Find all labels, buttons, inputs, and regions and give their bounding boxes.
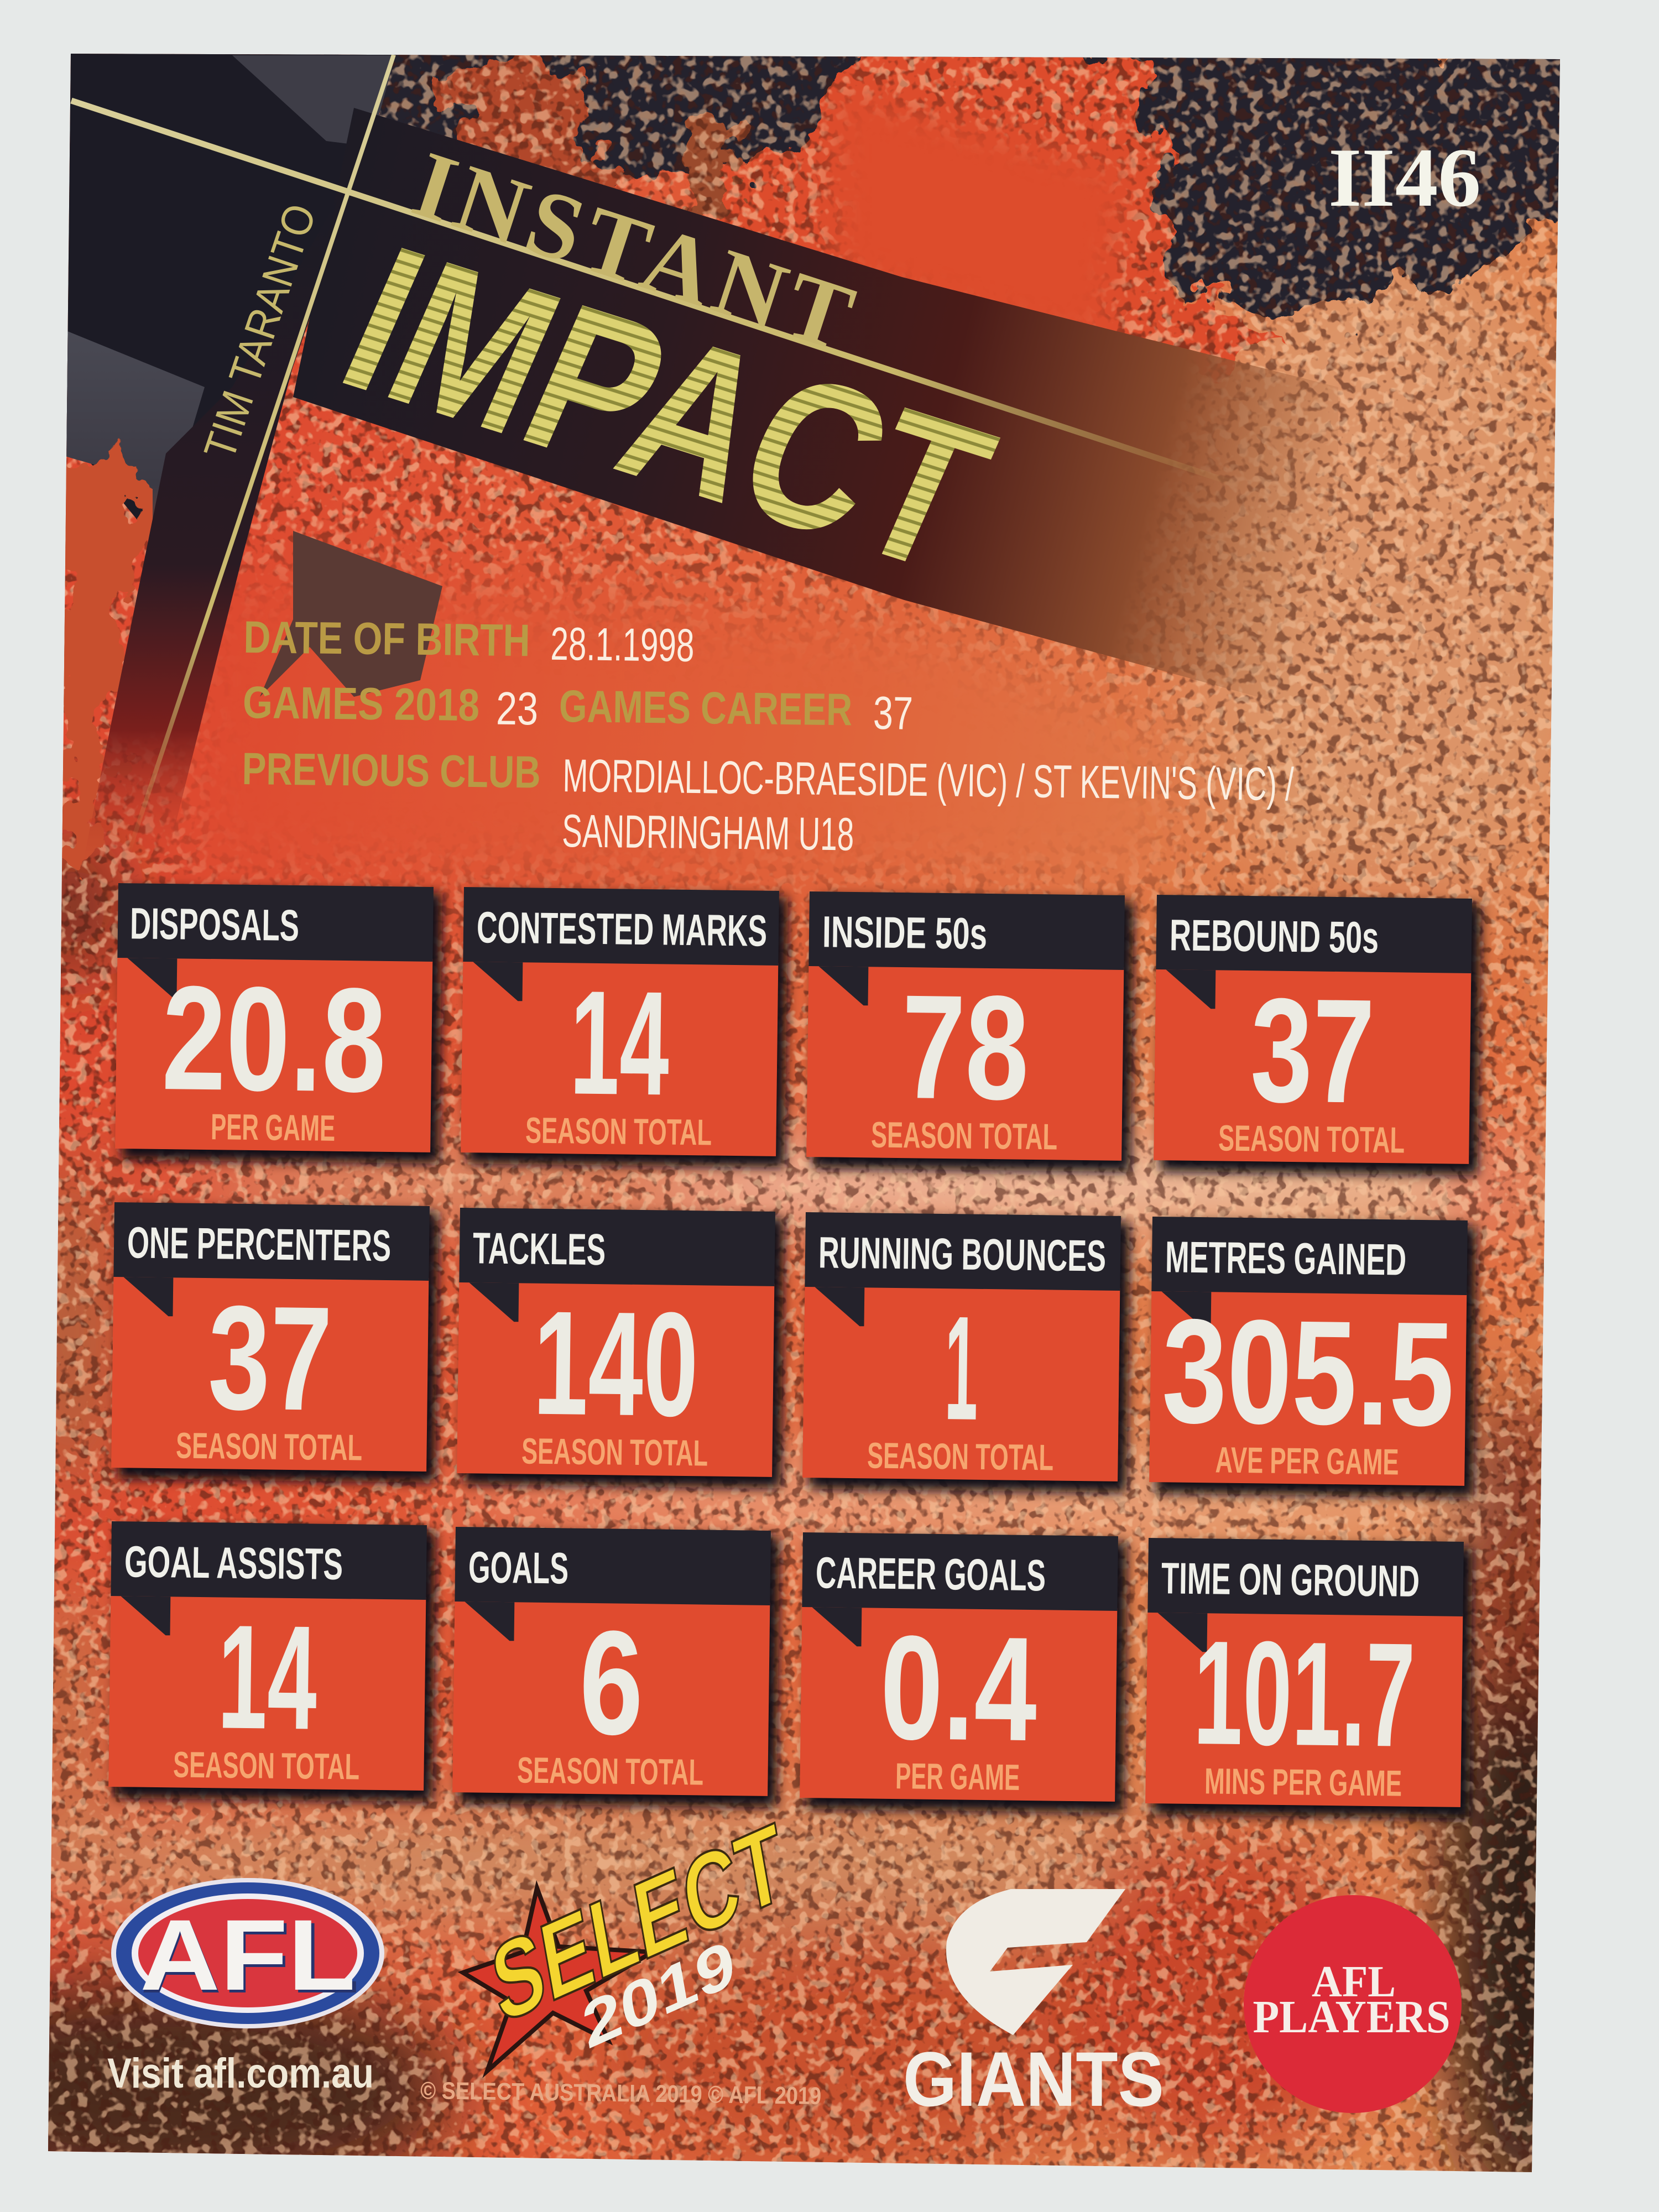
stat: running bounces: SEASON TOTAL bbox=[867, 1434, 1054, 1478]
stat: goal assists: SEASON TOTAL bbox=[173, 1744, 360, 1787]
player details bbox=[241, 612, 1296, 865]
orange splash left edge bbox=[55, 465, 144, 857]
stat: disposals: PER GAME bbox=[211, 1106, 336, 1149]
previous club label: PREVIOUS CLUB bbox=[242, 744, 541, 798]
logo: Select 2019: 2019 bbox=[577, 1926, 740, 2063]
stat: career goals bbox=[800, 1532, 1127, 1813]
logo text: GIANTS: GIANTS bbox=[903, 2036, 1164, 2122]
stat: contested marks: 14 bbox=[569, 959, 671, 1126]
games career label: GAMES CAREER bbox=[559, 681, 853, 735]
dark upper sky bbox=[310, 33, 1604, 310]
stat: time on ground: TIME ON GROUND bbox=[1161, 1553, 1420, 1606]
stat: goal assists bbox=[108, 1521, 436, 1802]
games 2018 label: GAMES 2018 bbox=[243, 677, 480, 731]
stat: tackles: SEASON TOTAL bbox=[521, 1430, 708, 1474]
stat: metres gained: 305.5 bbox=[1161, 1287, 1455, 1457]
logo: AFL bbox=[111, 1878, 384, 2028]
previous club value line two: SANDRINGHAM U18 bbox=[562, 805, 854, 860]
stat: inside 50s bbox=[806, 891, 1134, 1172]
stat: goal assists: GOAL ASSISTS bbox=[124, 1537, 343, 1589]
gold line horizontal bbox=[71, 101, 1244, 487]
stat: one percenters: 37 bbox=[207, 1274, 333, 1442]
stat: career goals: CAREER GOALS bbox=[816, 1548, 1046, 1600]
games 2018 value: 23 bbox=[495, 682, 539, 735]
copyright text: © SELECT AUSTRALIA 2019 © AFL 2019 bbox=[420, 2077, 821, 2110]
website link text: Visit afl.com.au bbox=[107, 2050, 374, 2097]
stat: goals bbox=[452, 1527, 780, 1807]
stat: contested marks: SEASON TOTAL bbox=[525, 1109, 712, 1153]
stat: goal assists: 14 bbox=[217, 1593, 319, 1761]
title: INSTANT: INSTANT bbox=[401, 131, 865, 372]
logo: AFL Players bbox=[1244, 1895, 1462, 2113]
stat: disposals bbox=[115, 883, 442, 1164]
grey wedge left bbox=[55, 326, 205, 553]
stat: one percenters: ONE PERCENTERS bbox=[127, 1218, 392, 1270]
stat: rebound 50s: REBOUND 50s bbox=[1170, 910, 1379, 962]
stat: running bounces bbox=[802, 1212, 1130, 1493]
stat: disposals: DISPOSALS bbox=[130, 899, 300, 950]
stat: one percenters: SEASON TOTAL bbox=[176, 1425, 363, 1468]
gold line vertical bbox=[127, 55, 394, 857]
stat: rebound 50s: 37 bbox=[1250, 967, 1375, 1134]
stat: career goals: 0.4 bbox=[879, 1604, 1039, 1772]
stat: time on ground: 101.7 bbox=[1193, 1609, 1416, 1778]
stat: time on ground bbox=[1145, 1538, 1473, 1818]
stat: tackles: 140 bbox=[533, 1280, 699, 1447]
logo: AFL Players: PLAYERS bbox=[1253, 1991, 1450, 2043]
stat: rebound 50s: SEASON TOTAL bbox=[1218, 1117, 1405, 1161]
stat: metres gained: AVE PER GAME bbox=[1215, 1439, 1399, 1482]
stat: goals: SEASON TOTAL bbox=[517, 1749, 704, 1793]
stat: goals: 6 bbox=[578, 1599, 644, 1766]
logo: GWS G mark bbox=[946, 1889, 1125, 2035]
player name: TIM TARANTO bbox=[195, 198, 325, 465]
stat: metres gained bbox=[1149, 1217, 1477, 1497]
date of birth value: 28.1.1998 bbox=[550, 618, 695, 671]
date of birth label: DATE OF BIRTH bbox=[243, 612, 530, 666]
games career value: 37 bbox=[873, 687, 914, 739]
stat: inside 50s: 78 bbox=[901, 963, 1030, 1131]
smudge beneath band bbox=[260, 531, 442, 697]
stat: rebound 50s bbox=[1154, 895, 1481, 1175]
stat: one percenters bbox=[111, 1202, 439, 1483]
logo: Select 2019: SELECT bbox=[483, 1799, 792, 2047]
logo: AFL: AFL bbox=[140, 1898, 356, 2011]
top left dark panel bbox=[55, 44, 398, 608]
diagonal title band bbox=[293, 108, 1338, 719]
orange splashes in sky bbox=[442, 33, 1272, 398]
card number: II46 bbox=[1328, 131, 1481, 224]
stat: disposals: 20.8 bbox=[161, 954, 387, 1123]
stat: contested marks bbox=[461, 887, 788, 1167]
stat: running bounces: RUNNING BOUNCES bbox=[818, 1228, 1107, 1281]
grey wedge top bbox=[232, 55, 395, 147]
title: IMPACT: IMPACT bbox=[314, 202, 1021, 615]
stat: running bounces: 1 bbox=[944, 1285, 979, 1451]
stat: metres gained: METRES GAINED bbox=[1165, 1232, 1407, 1285]
stat: tackles: TACKLES bbox=[473, 1223, 606, 1274]
stat: contested marks: CONTESTED MARKS bbox=[477, 902, 768, 956]
previous club value line one: MORDIALLOC-BRAESIDE (VIC) / ST KEVIN'S (VIC) / bbox=[562, 749, 1294, 810]
stat: inside 50s: INSIDE 50s bbox=[822, 907, 988, 958]
stat: career goals: PER GAME bbox=[895, 1755, 1020, 1798]
logo: Select 2019 bbox=[463, 1799, 792, 2071]
stat: goals: GOALS bbox=[468, 1542, 569, 1593]
logo: AFL: AFL bbox=[140, 1901, 359, 2014]
vertical name strap bbox=[83, 199, 337, 863]
stat: inside 50s: SEASON TOTAL bbox=[871, 1114, 1058, 1157]
stat: time on ground: MINS PER GAME bbox=[1204, 1760, 1402, 1804]
logo: AFL Players: AFL bbox=[1312, 1958, 1396, 2006]
stat: tackles bbox=[457, 1208, 784, 1488]
